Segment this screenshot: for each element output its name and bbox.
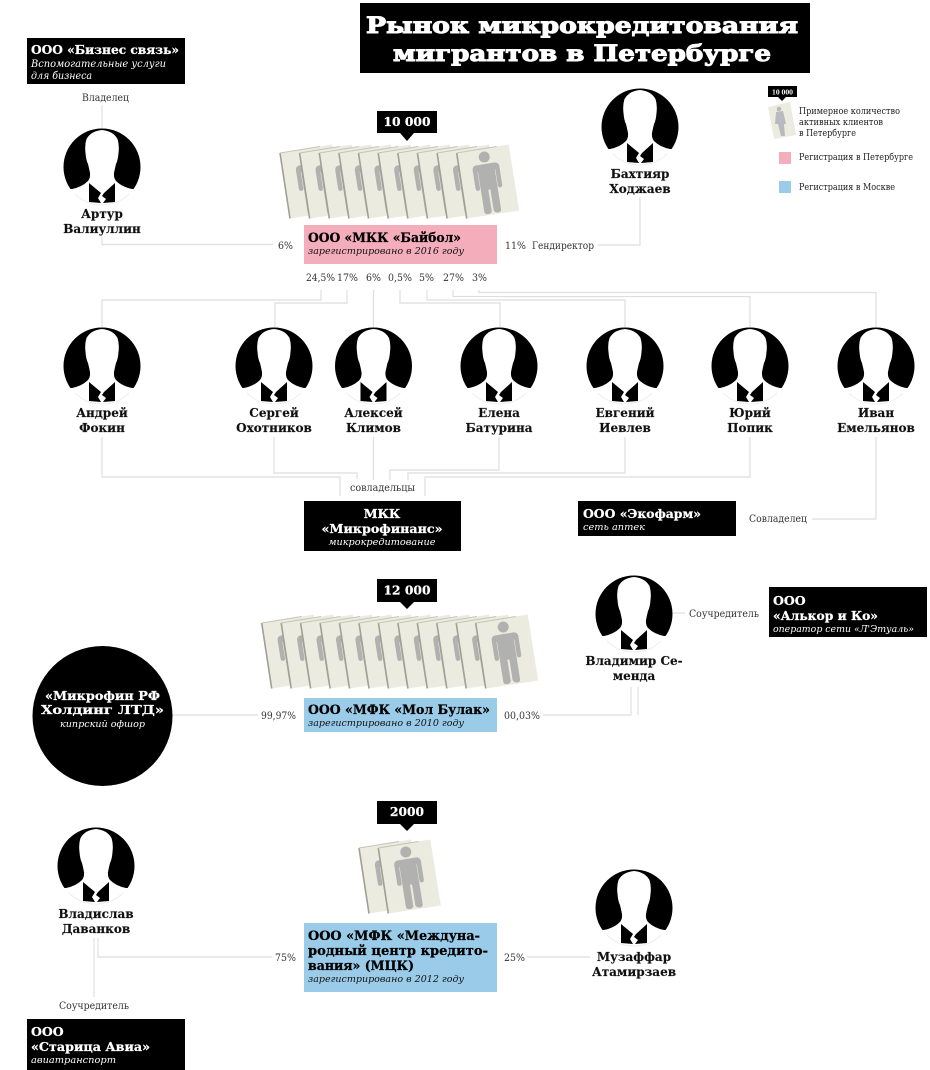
shares: Байбол: 17% [337, 272, 358, 284]
shares: Байбол: 11% [505, 240, 526, 252]
title: мигрантов в Петербурге [393, 41, 771, 67]
person: Иван Емельянов: Емельянов [837, 421, 915, 435]
company box: Старица Авиа: «Старица Авиа» [31, 1039, 150, 1054]
legend: Регистрация в Москве [799, 183, 895, 193]
label: Владелец: Владелец [82, 92, 129, 104]
company box: Бизнес связь: для бизнеса [31, 71, 92, 82]
shares: Мол Булак: 99,97% [261, 710, 296, 722]
client tag: 10 000 [377, 111, 437, 141]
company box: Международный центр кредитования: вания» (МЦК) [308, 959, 414, 974]
company box: Алькор и Ко: ООО [773, 593, 806, 608]
company box: Байбол: зарегистрировано в 2016 году [308, 246, 464, 257]
person: Сергей Охотников [236, 328, 312, 435]
company box: Экофарм: сеть аптек [583, 522, 645, 533]
person: Андрей Фокин: Андрей [76, 406, 128, 420]
shares: Мол Булак: 00,03% [504, 710, 540, 722]
company box: Экофарм: ООО «Экофарм» [583, 506, 701, 521]
person: Владислав Даванков: Владислав [58, 907, 134, 921]
company box: Мол Булак: зарегистрировано в 2010 году [308, 718, 464, 729]
client tag: 12 000 [377, 579, 437, 609]
person: Елена Батурина: Елена [478, 406, 520, 420]
company box: Международный центр кредитования: ООО «МФК «Междуна- [308, 929, 480, 944]
person: Юрий Попик [712, 328, 788, 435]
company box: Мол Булак [304, 698, 497, 732]
person: Иван Емельянов [837, 328, 915, 435]
legend: активных клиентов [799, 118, 883, 128]
client tag: 2000 [377, 801, 437, 831]
person: Сергей Охотников: Охотников [236, 421, 312, 435]
shares: Мол Булак [261, 710, 540, 722]
company box: Международный центр кредитования: зарегистрировано в 2012 году [308, 974, 464, 985]
title: Рынок микрокредитования [366, 13, 798, 39]
person: Владимир Се-менда [585, 576, 683, 683]
person: Иван Емельянов: Иван [858, 406, 894, 420]
person: Артур Валиуллин: Валиуллин [63, 222, 141, 236]
company box: Старица Авиа [27, 1019, 185, 1070]
shares: Байбол: 27% [443, 272, 464, 284]
company box: Бизнес связь [27, 38, 185, 84]
person: Владимир Се-менда: Владимир Се- [585, 654, 683, 668]
person: Музаффар Атамирзаев [592, 870, 676, 979]
shares: Байбол: 0,5% [388, 272, 412, 284]
company box: Микрофинанс: микрокредитование [328, 537, 436, 548]
offshore circle: Микрофин РФ [32, 646, 172, 786]
shares: Байбол: 5% [419, 272, 434, 284]
person: Андрей Фокин: Фокин [79, 421, 125, 435]
client cards: 12 000 [262, 614, 538, 688]
shares: Байбол: Гендиректор [532, 240, 594, 252]
legend tag [768, 86, 797, 101]
company box: Алькор и Ко [769, 587, 927, 637]
company box: Бизнес связь: ООО «Бизнес связь» [31, 42, 179, 57]
person: Елена Батурина: Батурина [466, 421, 533, 435]
legend: Примерное количество [799, 107, 900, 117]
legend: 10 000 [772, 88, 793, 96]
connector lines [94, 105, 876, 997]
person: Артур Валиуллин: Артур [81, 207, 123, 221]
company box: Байбол [304, 225, 497, 264]
person: Юрий Попик: Попик [727, 421, 773, 435]
client tag: 12 000: 12 000 [384, 582, 431, 598]
offshore circle: Микрофин РФ: «Микрофин РФ [45, 688, 160, 703]
person: Елена Батурина [460, 328, 538, 435]
person: Андрей Фокин [64, 328, 140, 435]
shares: МЦК: 25% [504, 952, 525, 964]
shares: МЦК: 75% [275, 952, 296, 964]
person: Музаффар Атамирзаев: Музаффар [597, 950, 671, 964]
person: Владимир Се-менда: менда [613, 669, 656, 683]
person: Владислав Даванков: Даванков [62, 922, 130, 936]
shares: Байбол: 6% [366, 272, 381, 284]
shares: Байбол: 3% [472, 272, 487, 284]
person: Музаффар Атамирзаев: Атамирзаев [592, 965, 676, 979]
company box: Бизнес связь: Вспомогательные услуги [30, 59, 166, 70]
company box: Алькор и Ко: оператор сети «Л'Этуаль» [773, 624, 914, 635]
legend: Регистрация в Петербурге [799, 152, 913, 163]
client cards: 10 000 [280, 144, 519, 218]
person: Алексей Климов: Алексей [344, 406, 403, 420]
company box: Байбол: ООО «МКК «Байбол» [308, 231, 461, 246]
client cards: 2000 [359, 840, 441, 914]
company box: Экофарм [578, 501, 736, 536]
label: совладельцы: совладельцы [350, 482, 415, 494]
person: Юрий Попик: Юрий [729, 406, 771, 420]
offshore circle: Микрофин РФ: Холдинг ЛТД» [41, 702, 164, 717]
person: Сергей Охотников: Сергей [249, 406, 299, 420]
person: Бахтияр Ходжаев: Ходжаев [609, 182, 671, 196]
legend [768, 86, 913, 193]
client tag: 10 000: 10 000 [384, 114, 431, 129]
label: Совладелец: Совладелец [749, 513, 807, 525]
person: Евгений Иевлев [586, 328, 664, 435]
label: Соучредитель: Соучредитель [689, 608, 759, 620]
company box: Микрофинанс: МКК [364, 506, 401, 521]
company box: Международный центр кредитования: родный центр кредито- [308, 944, 488, 959]
company box: Алькор и Ко: «Алькор и Ко» [773, 608, 878, 623]
person: Алексей Климов [335, 328, 412, 435]
label: Соучредитель: Соучредитель [59, 1000, 129, 1012]
title [360, 3, 810, 73]
company box: Международный центр кредитования [304, 923, 497, 992]
shares: Байбол: 24,5% [306, 272, 335, 284]
person: Владислав Даванков [58, 828, 134, 936]
legend: в Петербурге [799, 128, 856, 139]
company box: Мол Булак: ООО «МФК «Мол Булак» [308, 703, 490, 718]
person: Артур Валиуллин [63, 128, 141, 236]
company box: Старица Авиа: авиатранспорт [31, 1055, 116, 1066]
company box: Микрофинанс: «Микрофинанс» [322, 521, 442, 536]
client tag: 2000: 2000 [390, 804, 424, 819]
person: Бахтияр Ходжаев: Бахтияр [611, 167, 669, 181]
offshore circle: Микрофин РФ: кипрский офшор [60, 719, 145, 730]
person: Евгений Иевлев: Иевлев [599, 421, 651, 435]
company box: Старица Авиа: ООО [31, 1024, 64, 1039]
person: Алексей Климов: Климов [346, 421, 401, 435]
shares: МЦК [275, 952, 525, 964]
company box: Микрофинанс [304, 501, 461, 551]
person: Евгений Иевлев: Евгений [595, 406, 655, 420]
person: Бахтияр Ходжаев [602, 88, 678, 196]
shares: Байбол: 6% [278, 240, 293, 252]
shares: Байбол [278, 240, 594, 284]
